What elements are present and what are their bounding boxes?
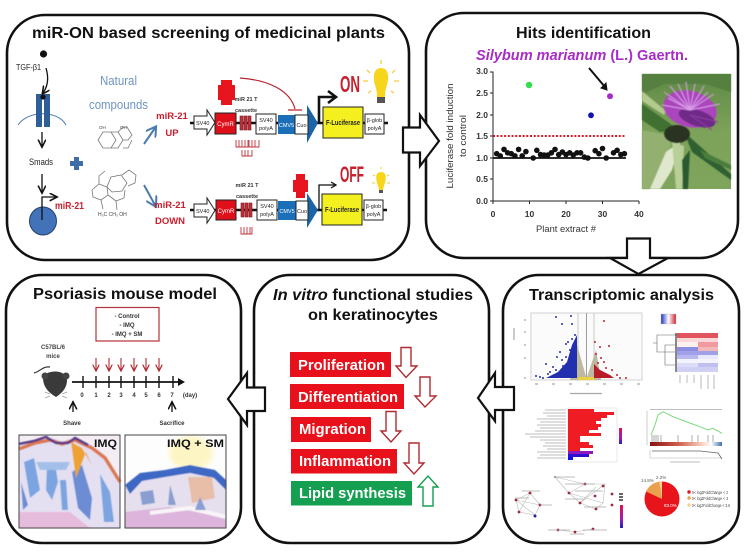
- chart: volcano plot: [514, 313, 642, 394]
- panel: hits identification: [426, 13, 738, 258]
- result: proliferation down: [290, 348, 417, 378]
- diagram: treatment timeline: Shave: [63, 421, 81, 427]
- result: inflammation down: [291, 443, 424, 474]
- chart: luciferase scatter plot: 40: [634, 209, 644, 219]
- legend: treatment groups: - IMQ + SM: [112, 332, 142, 338]
- diagram: ON reporter construct: CymR: [217, 122, 234, 128]
- photo: IMQ + SM histology: [125, 435, 226, 528]
- label: natural compounds: [89, 73, 148, 112]
- label: miR-21 UP: [156, 111, 189, 139]
- diagram: OFF reporter construct: miR 21 T: [236, 183, 259, 189]
- diagram: ON reporter construct: ON: [340, 71, 360, 97]
- icon: chemical structures: OH: [120, 125, 127, 130]
- photo: IMQ + SM histology: IMQ + SM: [167, 438, 224, 450]
- photo: IMQ histology: [19, 435, 120, 528]
- diagram: OFF reporter construct: OFF: [340, 162, 364, 187]
- diagram: OFF reporter construct: cassette: [236, 194, 258, 200]
- arrow: transcriptomic to in vitro: [478, 373, 514, 421]
- chart: luciferase scatter plot: 20: [561, 209, 571, 219]
- chart: pie chart with legend: 0< log2FoldChange < 3: [692, 496, 728, 501]
- chart: luciferase scatter plot: 10: [525, 209, 534, 219]
- chart: luciferase scatter plot: 0: [491, 209, 496, 219]
- diagram: OFF reporter construct: polyA: [367, 212, 381, 218]
- panel: miR-ON based screening: [7, 15, 409, 260]
- diagram: TGF-β1 signalling pathway: TGF-β1: [16, 63, 41, 72]
- label: miR-21 DOWN: miR-21: [154, 200, 187, 211]
- diagram: ON reporter construct: cassette: [235, 108, 257, 114]
- chart: luciferase scatter plot: 0.5: [476, 174, 488, 184]
- arrow: compounds to miR-21 up: [144, 128, 155, 144]
- panel: transcriptomic analysis: [503, 275, 739, 543]
- chart: pie chart with legend: 2.2%: [656, 475, 666, 480]
- arrow: in vitro to psoriasis model: [228, 373, 265, 425]
- chart: luciferase scatter plot: 2.0: [476, 110, 488, 120]
- icon: chemical structures: OH: [99, 125, 106, 130]
- label: miR-21 UP: miR-21: [156, 111, 189, 122]
- label: C57BL/6 mice: C57BL/6: [41, 345, 66, 351]
- photo: IMQ histology: IMQ: [94, 438, 117, 450]
- chart: enrichment bar chart: [525, 408, 622, 462]
- panel: in vitro functional studies: [254, 275, 489, 543]
- chart: heatmap with dendrogram: [653, 314, 718, 389]
- result: migration down: Migration: [299, 422, 366, 438]
- heading: psoriasis mouse model: Psoriasis mouse model: [33, 286, 217, 303]
- icon: blue plus: [70, 157, 83, 170]
- chart: pie chart with legend: 14.8%: [641, 478, 654, 483]
- diagram: treatment timeline: 5: [144, 393, 148, 399]
- diagram: OFF reporter construct: SV40: [260, 204, 274, 210]
- chart: luciferase scatter plot: 0.0: [476, 196, 488, 206]
- diagram: TGF-β1 signalling pathway: miR-21: [55, 201, 84, 212]
- chart: pie chart with legend: 0< log2FoldChange < 3.6: [692, 503, 730, 508]
- result: migration down: [291, 412, 401, 442]
- heading: Silybum marianum: Silybum marianum (L.) Gaertn.: [476, 47, 688, 64]
- diagram: OFF reporter construct: Cuo: [297, 209, 307, 215]
- result: lipid synthesis up: [291, 476, 438, 506]
- diagram: treatment timeline: 2: [107, 393, 111, 399]
- arrow: hits to transcriptomic: [610, 238, 668, 274]
- diagram: treatment timeline: 6: [157, 393, 161, 399]
- heading: in vitro functional studies: on keratinocytes: [308, 307, 438, 324]
- diagram: treatment timeline: 4: [132, 393, 136, 399]
- diagram: OFF reporter construct: F-Luciferase: [325, 207, 359, 214]
- diagram: ON reporter construct: SV40: [196, 121, 209, 127]
- chart: luciferase scatter plot: 30: [598, 209, 607, 219]
- result: lipid synthesis up: Lipid synthesis: [299, 486, 406, 502]
- diagram: ON reporter construct: CMV5: [279, 123, 294, 129]
- chart: luciferase scatter plot: to control: [458, 115, 469, 157]
- icon: chemical structures: H₃C CH₃ OH: [98, 212, 127, 218]
- diagram: ON reporter construct: miR 21 T: [235, 97, 258, 103]
- photo: milk thistle flower: [642, 74, 731, 189]
- diagram: ON reporter construct: SV40: [259, 118, 273, 124]
- heading: in vitro functional studies: In vitro functional studies: [273, 287, 473, 304]
- diagram: ON reporter construct: polyA: [259, 126, 273, 132]
- icon: small light bulb: [372, 167, 390, 193]
- diagram: OFF reporter construct: [190, 162, 387, 234]
- icon: mouse: [34, 367, 70, 398]
- diagram: ON reporter construct: Cuo: [296, 123, 307, 129]
- chart: luciferase scatter plot: 3.0: [476, 66, 488, 76]
- diagram: ON reporter construct: polyA: [368, 126, 382, 132]
- chart: luciferase scatter plot: 2.5: [476, 88, 488, 98]
- diagram: treatment timeline: 0: [80, 393, 84, 399]
- diagram: OFF reporter construct: polyA: [260, 212, 274, 218]
- chart: luciferase scatter plot: Luciferase fold induction: [445, 84, 456, 188]
- diagram: treatment timeline: 1: [94, 393, 98, 399]
- diagram: treatment timeline: Sacrifice: [159, 421, 185, 427]
- arrow: screening to hits: [403, 115, 439, 166]
- diagram: ON reporter construct: [190, 71, 388, 156]
- diagram: OFF reporter construct: CMV5: [279, 209, 295, 215]
- result: inflammation down: Inflammation: [299, 454, 391, 470]
- arrow: compounds to miR-21 down: [144, 185, 155, 205]
- heading: in vitro functional studies: [273, 287, 473, 324]
- icon: large light bulb: [363, 60, 399, 103]
- chart: GSEA enrichment plot: [647, 410, 722, 462]
- diagram: TGF-β1 signalling pathway: Smads: [29, 157, 53, 167]
- chart: pie chart with legend: 83.0%: [664, 503, 677, 508]
- diagram: treatment timeline: 3: [119, 393, 123, 399]
- legend: treatment groups: - Control: [114, 314, 140, 320]
- diagram: OFF reporter construct: CymR: [218, 209, 235, 215]
- result: proliferation down: Proliferation: [298, 358, 385, 374]
- heading: transcriptomic analysis: Transcriptomic analysis: [529, 287, 714, 304]
- icon: chemical structures: [92, 125, 136, 218]
- chart: pie chart with legend: [641, 475, 730, 516]
- chart: luciferase scatter plot: 1.0: [476, 153, 488, 163]
- diagram: ON reporter construct: F-Luciferase: [326, 120, 360, 127]
- arrow: pointing to Silybum hit: [589, 68, 607, 90]
- diagram: treatment timeline: (day): [183, 393, 197, 399]
- chart: gene network: [515, 476, 623, 534]
- label: miR-21 DOWN: [154, 200, 187, 227]
- diagram: ON reporter construct: β-glob: [367, 118, 382, 124]
- label: natural compounds: compounds: [89, 97, 148, 112]
- label: miR-21 UP: UP: [165, 128, 179, 139]
- label: natural compounds: Natural: [100, 73, 137, 88]
- legend: treatment groups: [96, 308, 159, 341]
- diagram: treatment timeline: 7: [170, 393, 174, 399]
- result: differentiation down: Differentiation: [298, 390, 398, 406]
- chart: luciferase scatter plot: Plant extract #: [536, 224, 596, 234]
- diagram: TGF-β1 signalling pathway: [16, 50, 84, 235]
- label: miR-21 DOWN: DOWN: [155, 216, 185, 227]
- result: differentiation down: [290, 377, 436, 409]
- diagram: OFF reporter construct: SV40: [196, 209, 209, 215]
- diagram: treatment timeline: [63, 358, 197, 427]
- heading: hits identification: Hits identification: [516, 25, 651, 42]
- chart: luciferase scatter plot: [445, 66, 644, 234]
- chart: pie chart with legend: 0< log2FoldChange < 2: [692, 490, 728, 495]
- diagram: OFF reporter construct: β-glob: [366, 204, 381, 210]
- heading: miR-ON screening: miR-ON based screening of medicinal plants: [32, 25, 385, 42]
- legend: treatment groups: - IMQ: [120, 323, 135, 329]
- chart: luciferase scatter plot: 1.5: [476, 131, 488, 141]
- label: C57BL/6 mice: mice: [46, 354, 60, 360]
- panel: psoriasis mouse model: [6, 275, 241, 543]
- label: C57BL/6 mice: [41, 345, 66, 360]
